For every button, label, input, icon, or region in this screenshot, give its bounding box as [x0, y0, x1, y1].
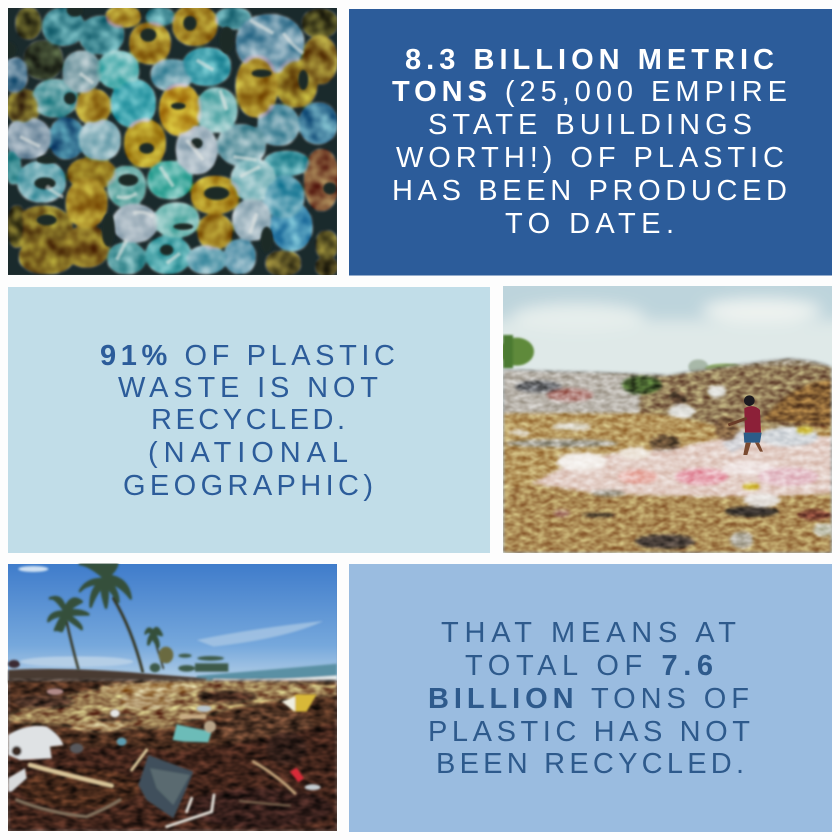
statistic text: plastic produced to date: WORTH!) OF PLASTIC	[396, 142, 784, 174]
statistic text: plastic produced to date: HAS BEEN PRODUCED	[392, 175, 787, 207]
statistic text: share of waste not recycled: GEOGRAPHIC)	[123, 470, 373, 502]
panel: 8.3 billion metric tons	[349, 9, 832, 276]
statistic text: share of waste not recycled: (NATIONAL	[148, 437, 348, 469]
statistic text: total not recycled: TOTAL OF 7.6	[465, 650, 713, 682]
statistic text: share of waste not recycled: 91% OF PLASTIC	[100, 340, 395, 372]
photo: pile of plastic bags	[0, 3, 338, 275]
statistic text: plastic produced to date: STATE BUILDINGS	[428, 109, 752, 141]
statistic text: total not recycled	[428, 617, 750, 780]
panel: 7.6 billion tons total	[349, 564, 832, 832]
statistic text: total not recycled: BILLION TONS OF	[428, 683, 749, 715]
statistic text: plastic produced to date	[392, 44, 787, 240]
statistic text: share of waste not recycled	[100, 340, 395, 502]
statistic text: total not recycled: BEEN RECYCLED.	[436, 748, 744, 780]
palm trees	[48, 564, 228, 672]
statistic text: share of waste not recycled: RECYCLED.	[151, 404, 345, 436]
photo: child collecting plastic at a landfill	[503, 286, 832, 553]
debris: driftwood and dark plastic sheet	[17, 750, 295, 827]
statistic text: total not recycled: THAT MEANS AT	[441, 617, 736, 649]
child figure	[728, 395, 763, 455]
photo: littered tropical beach	[8, 564, 337, 831]
panel: 91% not recycled	[8, 287, 490, 553]
statistic text: share of waste not recycled: WASTE IS NOT	[118, 372, 378, 404]
statistic text: total not recycled: PLASTIC HAS NOT	[428, 716, 750, 748]
statistic text: plastic produced to date: TONS (25,000 EMPIRE	[392, 76, 787, 108]
statistic text: plastic produced to date: 8.3 BILLION METRIC	[405, 44, 774, 76]
statistic text: plastic produced to date: TO DATE.	[505, 208, 674, 240]
